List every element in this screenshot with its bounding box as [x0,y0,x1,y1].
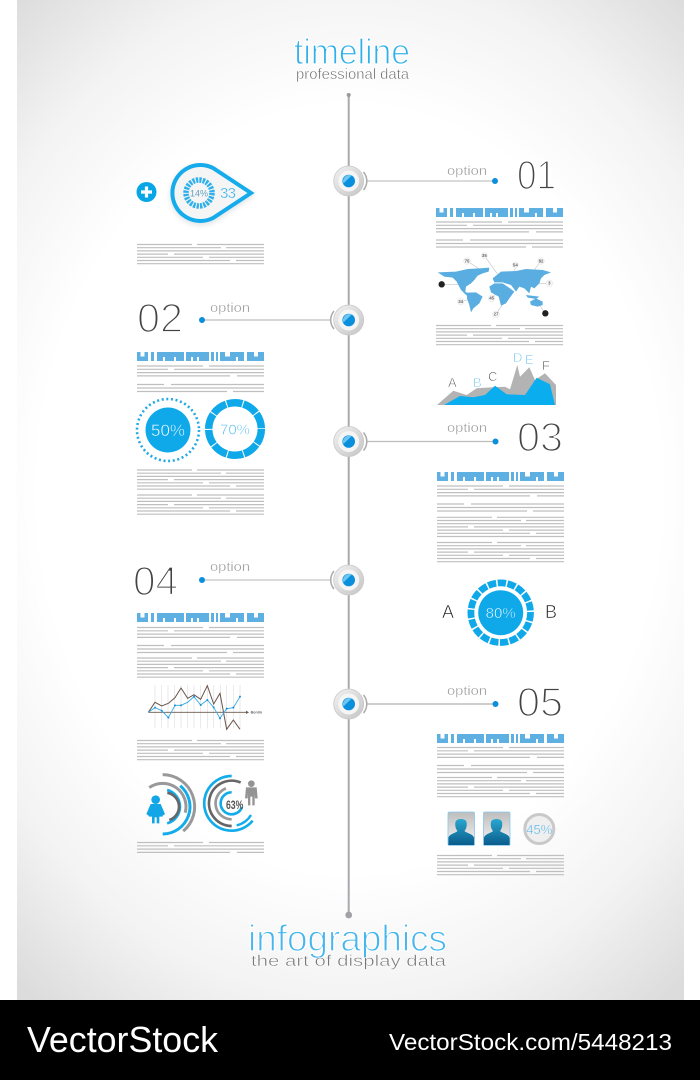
footer image id: VectorStock.com/5448213 [389,1029,672,1055]
section 04 text middle [137,740,264,760]
icon: male figure [245,780,258,805]
node 02 with connector [199,305,364,335]
world map [438,253,553,318]
number 02: 02 [137,295,183,341]
radial chart: male [204,776,258,831]
icon: plus button [136,182,156,202]
option label 03: option [447,420,487,435]
node 05 with connector [334,689,498,719]
donut 50% [137,399,199,461]
map markers [457,253,553,318]
node 03 with connector [334,426,498,456]
footer subtitle: the art of display data [251,953,446,970]
chart percentage: 63% [226,798,244,812]
map values: 3 [548,281,551,286]
section 05 heading band [437,734,564,743]
continents [438,268,551,312]
leader lines [442,256,549,314]
map values: 75 [465,258,470,263]
badge 45%: 45% [526,822,553,837]
map values [458,253,551,317]
section 05 text upper [437,748,564,797]
donut label B: B [545,602,557,622]
text block: section 1 caption [137,244,264,264]
map values: 35 [482,253,487,258]
axis label: Bonlin [251,711,262,715]
donut 50%: 50% [151,421,185,440]
badge 45% [525,814,554,844]
section 02 text upper [137,366,264,392]
sunburst ring [186,180,212,206]
map values: 27 [494,312,499,317]
title: timeline [294,31,410,72]
timeline axis [345,93,352,918]
node 04 with connector [199,565,364,595]
section 04 heading band [137,613,264,622]
avatar 2 [484,812,510,846]
radial chart: female [146,775,195,834]
option label 01: option [447,163,487,178]
donut label A: A [442,602,454,622]
footer brand: VectorStock [27,1019,219,1060]
node 01 with connector [334,166,498,196]
pin badge [172,165,251,221]
section 04 text lower [137,842,264,852]
section 03 heading band [437,472,564,481]
option label 05: option [447,683,487,698]
area chart: E [525,352,534,367]
icon: female figure [146,795,165,823]
number 03: 03 [517,414,563,460]
subtitle: professional data [296,66,410,83]
section 03 text [437,486,564,562]
map values: 45 [489,296,495,301]
donut 80%: 80% [486,605,516,622]
section 01 text lower [436,326,563,345]
footer bar [0,1000,700,1080]
avatar 1 [448,812,474,846]
pin value: 33 [220,185,236,202]
section 02 heading band [137,352,264,361]
section 05 text lower [437,856,564,875]
section 02 text lower [137,470,264,514]
option label 04: option [210,559,250,574]
number 04: 04 [133,558,178,604]
map values: 54 [513,262,518,267]
section 04 text upper [137,628,264,677]
section 01 heading band [436,208,563,217]
option label 02: option [210,300,250,315]
map values: 82 [539,258,544,263]
number 01: 01 [517,152,556,198]
donut 80% [442,583,557,642]
area chart: C [488,369,497,384]
map values: 34 [458,299,464,304]
area chart: B [473,375,482,390]
section 01 text upper [436,222,563,247]
line chart [148,685,262,729]
pin percentage: 14% [190,188,208,198]
donut 70%: 70% [220,422,250,438]
area chart: D [513,350,522,365]
donut 70% [209,403,261,455]
area chart [437,350,556,405]
number 05: 05 [517,679,563,725]
footer title: infographics [248,918,447,959]
chart labels: A [448,375,457,390]
area chart: F [542,358,550,373]
